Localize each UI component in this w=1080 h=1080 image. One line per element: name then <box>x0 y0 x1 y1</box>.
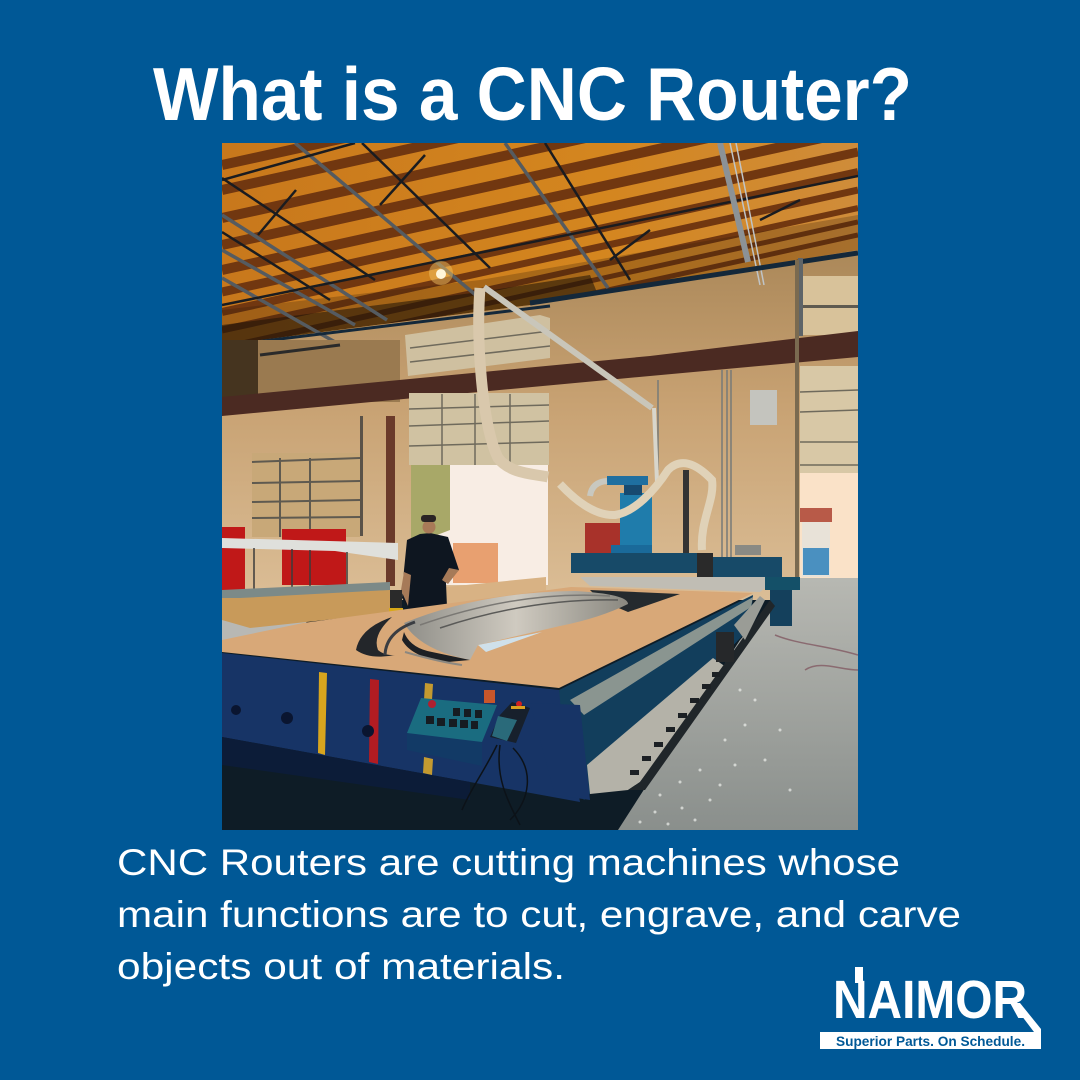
wall unit <box>750 390 777 425</box>
cut metal sheet pieces <box>356 591 628 665</box>
metal chip tray <box>587 596 775 794</box>
conduit pipes <box>658 370 731 560</box>
NAIMOR logo: Superior Parts. On Schedule. <box>836 1033 1025 1049</box>
dark pipe along wall <box>222 253 858 346</box>
photo: CNC router in a workshop <box>222 143 858 830</box>
table top <box>222 587 753 688</box>
dark base under machine <box>222 600 770 830</box>
upper arched door <box>405 315 550 376</box>
description text: main functions are to cut, engrave, and carve <box>117 894 961 935</box>
red panels <box>222 527 346 591</box>
holes in table side <box>231 705 374 737</box>
red steel beam <box>222 331 858 416</box>
far left paper-covered table <box>222 588 390 628</box>
description text <box>117 842 961 987</box>
table corner block <box>560 704 590 800</box>
upper right door <box>798 258 858 336</box>
yellow and red stripes on table <box>318 672 495 775</box>
back wall <box>222 240 858 610</box>
NAIMOR logo <box>820 967 1041 1049</box>
ceiling light <box>429 261 453 285</box>
worker <box>389 515 459 614</box>
title: What is a CNC Router? <box>153 52 912 136</box>
left roller door <box>252 416 395 586</box>
table side <box>222 653 580 802</box>
description text: objects out of materials. <box>117 946 565 987</box>
lower shadow band on table side <box>222 737 470 800</box>
gantry <box>571 545 800 626</box>
table right side <box>559 595 753 800</box>
dim upper left wall <box>222 340 400 402</box>
cables on the floor <box>775 635 858 670</box>
steel trusses <box>222 143 858 342</box>
control panel <box>407 698 497 742</box>
dust hose and arm <box>479 287 712 550</box>
vacuum unit <box>590 470 689 560</box>
white table top <box>222 538 398 598</box>
far bed sheet <box>590 590 680 612</box>
handheld pendant <box>490 701 530 743</box>
right lower door and opening <box>795 260 858 583</box>
wooden ceiling <box>222 143 858 340</box>
floor <box>618 578 858 830</box>
metal chips on the floor <box>638 688 792 826</box>
far right paper strip <box>446 577 546 604</box>
description text: CNC Routers are cutting machines whose <box>117 842 900 883</box>
pale floor behind table at left <box>222 620 306 640</box>
NAIMOR logo: NAIMOR <box>833 970 1027 1030</box>
center lower door and opening <box>409 393 549 585</box>
red fire door <box>585 523 620 553</box>
cables <box>462 745 527 825</box>
